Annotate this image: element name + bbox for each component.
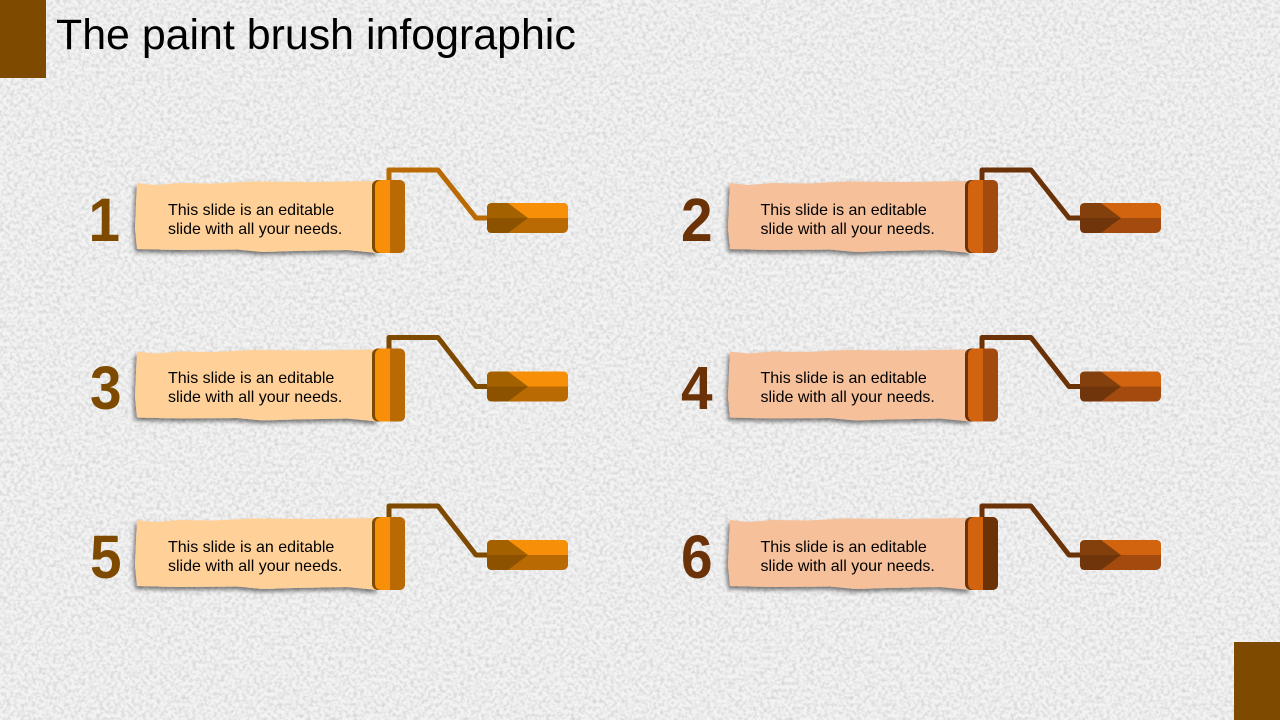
- text block 4: This slide is an editable: [760, 370, 927, 387]
- text block 3: slide with all your needs.: [168, 389, 342, 406]
- torn paper note 4: [728, 350, 971, 422]
- number 5: 5: [90, 524, 122, 591]
- panel: item 6: [681, 506, 1161, 591]
- panel: item 3: [90, 338, 568, 422]
- number 3: 3: [90, 355, 122, 422]
- text block 5: This slide is an editable: [168, 539, 334, 556]
- number 1: 1: [88, 187, 120, 254]
- paint roller 5: [372, 506, 568, 590]
- text block 5: slide with all your needs.: [168, 558, 342, 575]
- text block 2: This slide is an editable: [760, 202, 927, 219]
- text block 1: This slide is an editable: [168, 202, 334, 219]
- paint roller 3: [372, 338, 568, 422]
- number 6: 6: [681, 524, 713, 591]
- torn paper note 5: [135, 518, 378, 590]
- corner block: bottom right: [1234, 642, 1280, 720]
- torn paper note 6: [728, 518, 971, 590]
- title: The paint brush infographic: [56, 11, 576, 59]
- paint roller 4: [965, 338, 1161, 422]
- paint roller 1: [372, 170, 568, 253]
- text block 3: This slide is an editable: [168, 370, 334, 387]
- number 2: 2: [681, 187, 713, 254]
- text block 1: slide with all your needs.: [168, 221, 342, 238]
- text block 6: This slide is an editable: [760, 539, 927, 556]
- text block 6: slide with all your needs.: [760, 558, 935, 575]
- number 4: 4: [681, 355, 713, 422]
- torn paper note 2: [728, 181, 971, 253]
- torn paper note 1: [135, 181, 378, 253]
- panel: item 5: [90, 506, 568, 591]
- paint roller 6: [965, 506, 1161, 590]
- paint roller 2: [965, 170, 1161, 253]
- panel: item 2: [681, 170, 1161, 254]
- text block 4: slide with all your needs.: [760, 389, 935, 406]
- corner block: top left: [0, 0, 46, 78]
- text block 2: slide with all your needs.: [760, 221, 935, 238]
- panel: item 1: [88, 170, 568, 254]
- panel: item 4: [681, 338, 1161, 422]
- torn paper note 3: [135, 350, 378, 422]
